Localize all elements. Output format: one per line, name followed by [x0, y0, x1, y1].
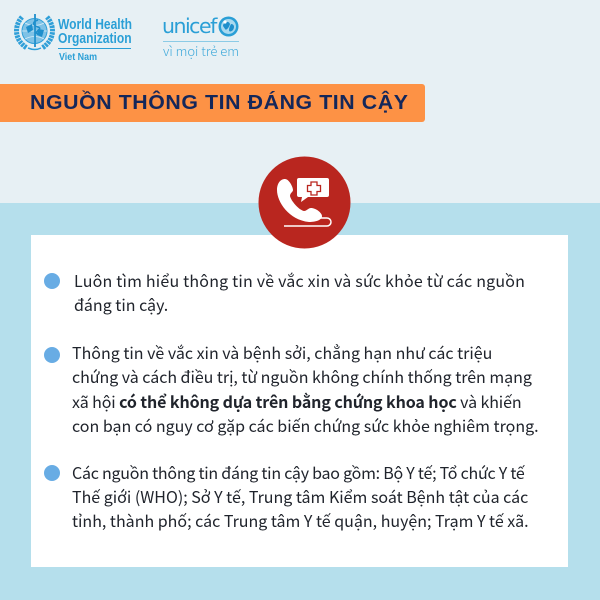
bullet 3 text: Thế giới (WHO); Sở Y tế, Trung tâm Kiểm soát Bệnh tật của các [72, 484, 528, 508]
bullet dot [44, 465, 60, 481]
WHO name [58, 17, 132, 63]
bullet 2 [44, 340, 539, 437]
UNICEF logo [162, 14, 239, 60]
bullet 2 text [72, 340, 539, 437]
bullet 3 [44, 460, 529, 532]
WHO emblem [14, 14, 55, 50]
WHO name: Organization [58, 31, 132, 47]
bullet dot [44, 273, 60, 289]
bullet 2 text: con bạn có nguy cơ gặp các biến chứng sức khỏe nghiêm trọng. [72, 413, 539, 437]
WHO name: Viet Nam [59, 51, 97, 63]
icon: UNICEF emblem [218, 16, 238, 36]
bullet 1 [44, 268, 525, 316]
bullet 1 text: Luôn tìm hiểu thông tin về vắc xin và sức khỏe từ các nguồn [74, 268, 525, 292]
UNICEF logo: unicef [162, 14, 216, 38]
white panel [31, 235, 568, 567]
bullet 1 text [74, 268, 525, 316]
bullet 3 text [72, 460, 529, 532]
bullet dot [44, 347, 60, 363]
bullet 2 text: chứng và cách điều trị, từ nguồn không chính thống trên mạng [72, 364, 532, 388]
bullet 2 text: xã hội có thể không dựa trên bằng chứng khoa học và khiến [72, 388, 522, 412]
bullet 2 text: Thông tin về vắc xin và bệnh sởi, chẳng hạn như các triệu [72, 340, 492, 364]
title banner [0, 84, 425, 122]
bullet 3 text: Các nguồn thông tin đáng tin cậy bao gồm: Bộ Y tế; Tổ chức Y tế [72, 460, 524, 484]
bullet 1 text: đáng tin cậy. [74, 292, 168, 316]
WHO name: World Health [58, 17, 132, 33]
UNICEF logo: vì mọi trẻ em [163, 41, 239, 60]
icon: phone with medical message [258, 156, 350, 248]
title: NGUỒN THÔNG TIN ĐÁNG TIN CẬY [30, 92, 408, 114]
bullet 3 text: tỉnh, thành phố; các Trung tâm Y tế quận, huyện; Trạm Y tế xã. [72, 508, 529, 532]
lower blue background [0, 203, 600, 600]
